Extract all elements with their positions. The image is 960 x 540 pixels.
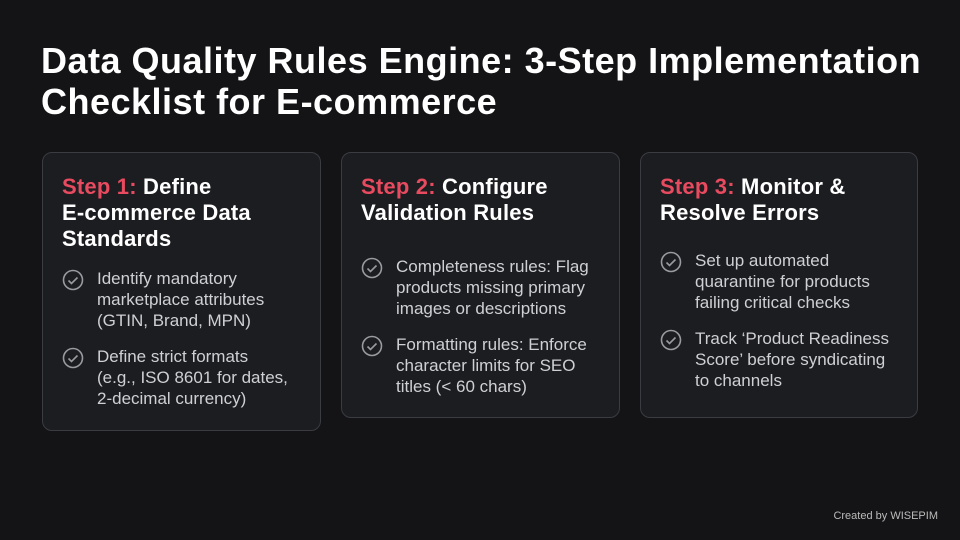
bullet: mandatory attributes: (GTIN, Brand, MPN) — [97, 311, 251, 330]
bullet: strict formats: 2-decimal currency) — [97, 389, 246, 408]
heading: step 1: Step 1: Define — [62, 174, 212, 199]
bullet: strict formats: (e.g., ISO 8601 for dates, — [97, 368, 288, 387]
heading: step 1 — [62, 174, 251, 251]
heading: step 3 — [660, 174, 846, 225]
bullet: quarantine: quarantine for products — [695, 272, 870, 291]
heading: step 2 — [361, 174, 548, 225]
panel: step 3 — [640, 152, 918, 418]
heading: step 1: E-commerce Data — [62, 200, 251, 225]
title: Checklist for E-commerce — [41, 81, 497, 122]
bullet: formatting: character limits for SEO — [396, 356, 576, 375]
bullet: formatting: titles (< 60 chars) — [396, 377, 527, 396]
title: Data Quality Rules Engine: 3-Step Implementation — [41, 40, 921, 81]
panel: step 2 — [341, 152, 620, 418]
heading: step 2: Step 2: Configure — [361, 174, 548, 199]
heading: step 3: Step 3: Monitor & — [660, 174, 846, 199]
heading: step 1: Standards — [62, 226, 171, 251]
bullet: readiness score: Score’ before syndicating — [695, 350, 885, 369]
bullet: completeness — [362, 257, 589, 318]
bullet: mandatory attributes — [62, 269, 264, 330]
bullet: mandatory attributes: marketplace attributes — [97, 290, 264, 309]
bullet: completeness: images or descriptions — [396, 299, 566, 318]
bullet: readiness score — [660, 329, 889, 390]
bullet: readiness score: to channels — [695, 371, 782, 390]
bullet: completeness: Completeness rules: Flag — [396, 257, 589, 276]
bullet: readiness score: Track ‘Product Readiness — [695, 329, 889, 348]
bullet: completeness: products missing primary — [396, 278, 585, 297]
bullet: formatting: Formatting rules: Enforce — [396, 335, 587, 354]
heading: step 3: Resolve Errors — [660, 200, 819, 225]
panel: step 1 — [42, 152, 321, 431]
title — [41, 40, 921, 122]
heading: step 2: Validation Rules — [361, 200, 534, 225]
footer credit: Created by WISEPIM — [833, 510, 938, 522]
bullet: quarantine — [660, 251, 870, 312]
bullet: strict formats: Define strict formats — [97, 347, 248, 366]
bullet: quarantine: failing critical checks — [695, 293, 850, 312]
bullet: quarantine: Set up automated — [695, 251, 829, 270]
bullet: mandatory attributes: Identify mandatory — [97, 269, 237, 288]
bullet: formatting — [362, 335, 587, 396]
bullet: strict formats — [62, 347, 288, 408]
